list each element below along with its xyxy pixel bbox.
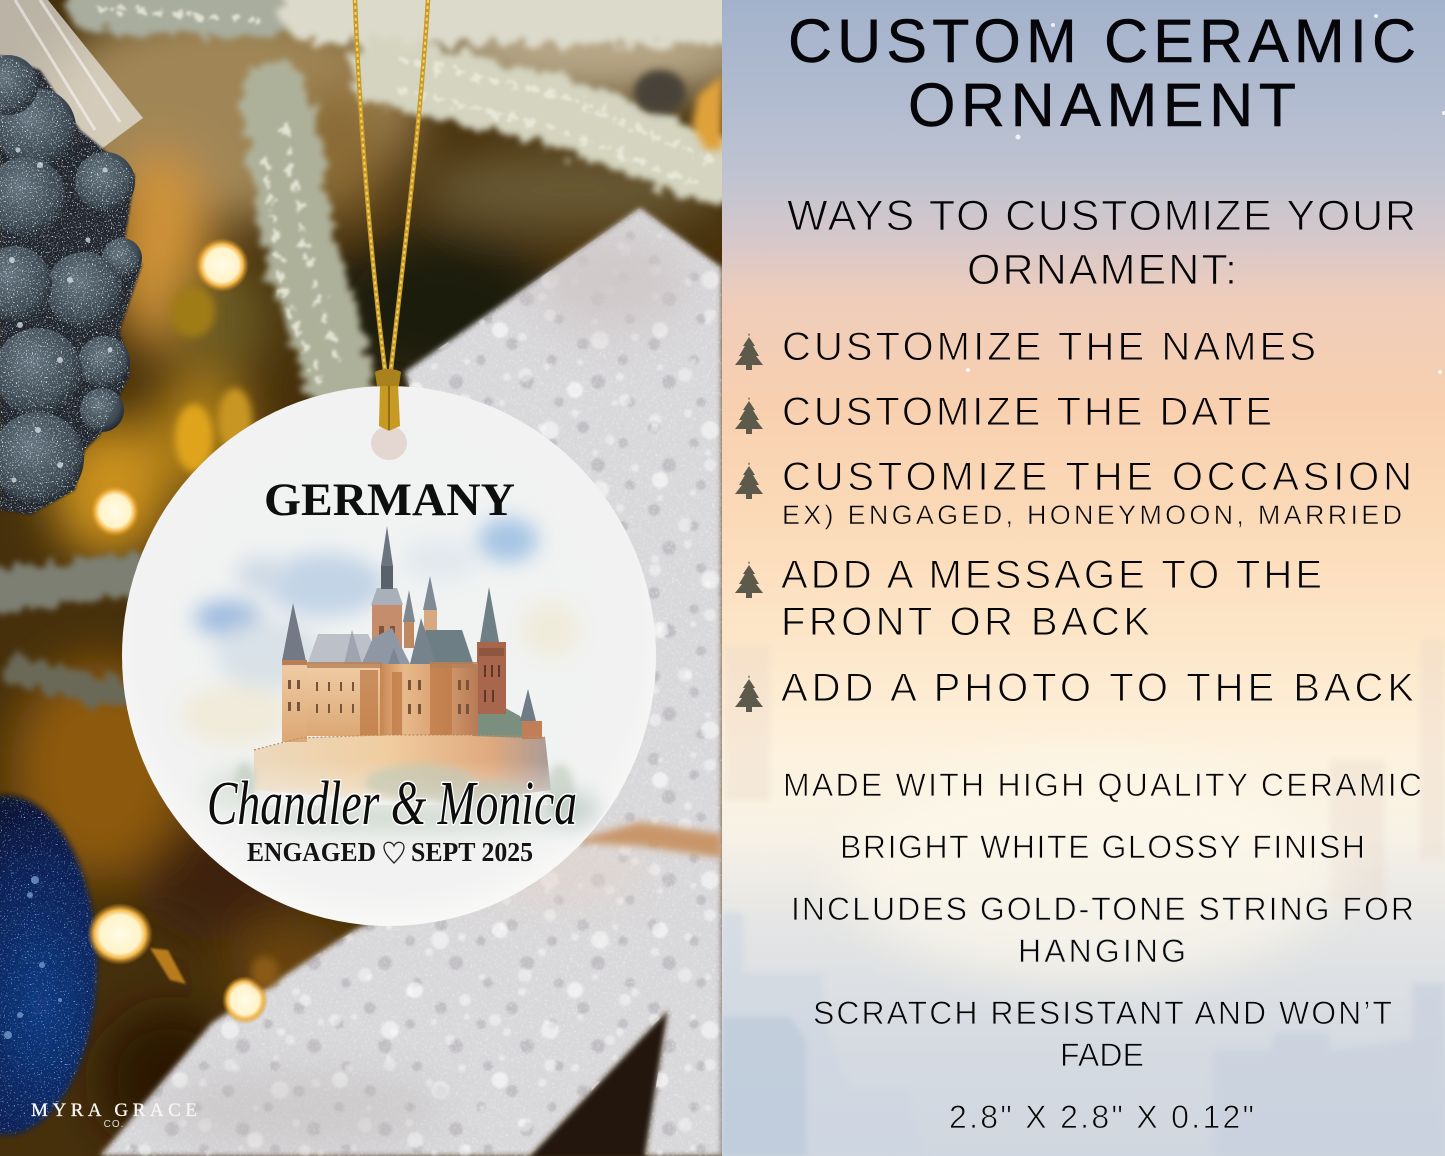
- rampart top edge: [254, 735, 545, 750]
- panel: ornament photo: [0, 0, 770, 1156]
- frost highlights: [100, 8, 710, 380]
- castle: [235, 526, 574, 816]
- blue glitter ornament: [0, 790, 100, 1140]
- centre gables: [344, 618, 436, 670]
- panel: product details background: [722, 0, 1445, 1156]
- glitter ribbon: [100, 200, 722, 1156]
- sheer ribbon at top left: [0, 0, 143, 150]
- item: date: CUSTOMIZE THE DATE: [782, 390, 1272, 434]
- dusk city silhouette: [722, 640, 1445, 1156]
- heading: GERMANY: GERMANY: [264, 474, 515, 526]
- occasion and date: ENGAGED: [247, 837, 376, 867]
- icon: tree: [735, 675, 763, 712]
- product features: 2.8" X 2.8" X 0.12": [949, 1099, 1254, 1135]
- item: occasion: [735, 455, 1412, 530]
- gold bauble behind branch: [634, 70, 722, 150]
- title: CUSTOM CERAMIC: [788, 7, 1416, 75]
- left grey roof: [306, 634, 385, 668]
- icon: heart: [384, 842, 404, 863]
- main castle body: [306, 664, 384, 736]
- central clock tower: [371, 526, 403, 653]
- brand watermark: CO.: [104, 1119, 124, 1130]
- icon: tree: [735, 397, 763, 434]
- gold string: [355, 0, 428, 378]
- left round tower: [282, 603, 307, 742]
- occasion examples: EX) ENGAGED, HONEYMOON, MARRIED: [782, 500, 1402, 530]
- item: photo: ADD A PHOTO TO THE BACK: [781, 666, 1414, 710]
- frosted branches: [0, 6, 722, 695]
- far right turret: [520, 689, 542, 739]
- occasion and date: [247, 837, 533, 867]
- dark gap under ribbon: [530, 1010, 668, 1156]
- cream mist: [840, 760, 1340, 980]
- item: message: [735, 553, 1322, 644]
- subtitle: [787, 192, 1416, 294]
- ceramic ornament disc: [122, 386, 656, 926]
- item: occasion: CUSTOMIZE THE OCCASION: [782, 455, 1412, 499]
- product features: MADE WITH HIGH QUALITY CERAMIC: [783, 767, 1422, 803]
- brand watermark: MYRA GRACE: [31, 1100, 197, 1121]
- sky sparkles: [966, 14, 1445, 374]
- watercolor scene: [180, 518, 600, 832]
- title: [788, 7, 1416, 139]
- silver berry cluster: [0, 54, 144, 516]
- icon: tree: [735, 561, 763, 598]
- product features: BRIGHT WHITE GLOSSY FINISH: [840, 829, 1365, 865]
- small spires: [403, 576, 437, 648]
- occasion and date: SEPT 2025: [411, 837, 533, 867]
- customization list: [735, 325, 1414, 712]
- hill and rampart: [254, 735, 551, 805]
- subtitle: ORNAMENT:: [967, 246, 1237, 294]
- string knot: [375, 369, 401, 431]
- castle windows: [288, 680, 469, 714]
- item: message: FRONT OR BACK: [781, 600, 1150, 644]
- tan ribbon edge: [570, 822, 722, 858]
- product features: HANGING: [1018, 933, 1186, 969]
- product features: FADE: [1060, 1037, 1144, 1073]
- item: names: CUSTOMIZE THE NAMES: [782, 325, 1316, 369]
- product features: [783, 767, 1422, 1135]
- script names: Chandler & Monica: [207, 770, 577, 838]
- hanging hole: [371, 426, 407, 460]
- subtitle: WAYS TO CUSTOMIZE YOUR: [787, 192, 1416, 240]
- product features: INCLUDES GOLD-TONE STRING FOR: [791, 891, 1414, 927]
- right brick tower: [477, 587, 506, 714]
- item: message: ADD A MESSAGE TO THE: [781, 553, 1322, 597]
- icon: tree: [735, 333, 763, 370]
- icon: tree: [735, 462, 763, 499]
- right slate roof: [426, 630, 474, 664]
- trees beside castle: [472, 708, 522, 738]
- watercolor clouds: [180, 518, 600, 832]
- product features: SCRATCH RESISTANT AND WON’T: [813, 995, 1392, 1031]
- foliage on hill: [235, 762, 574, 816]
- title: ORNAMENT: [908, 71, 1296, 139]
- warm background glow: [10, 0, 770, 1150]
- bokeh lights: [87, 238, 279, 1024]
